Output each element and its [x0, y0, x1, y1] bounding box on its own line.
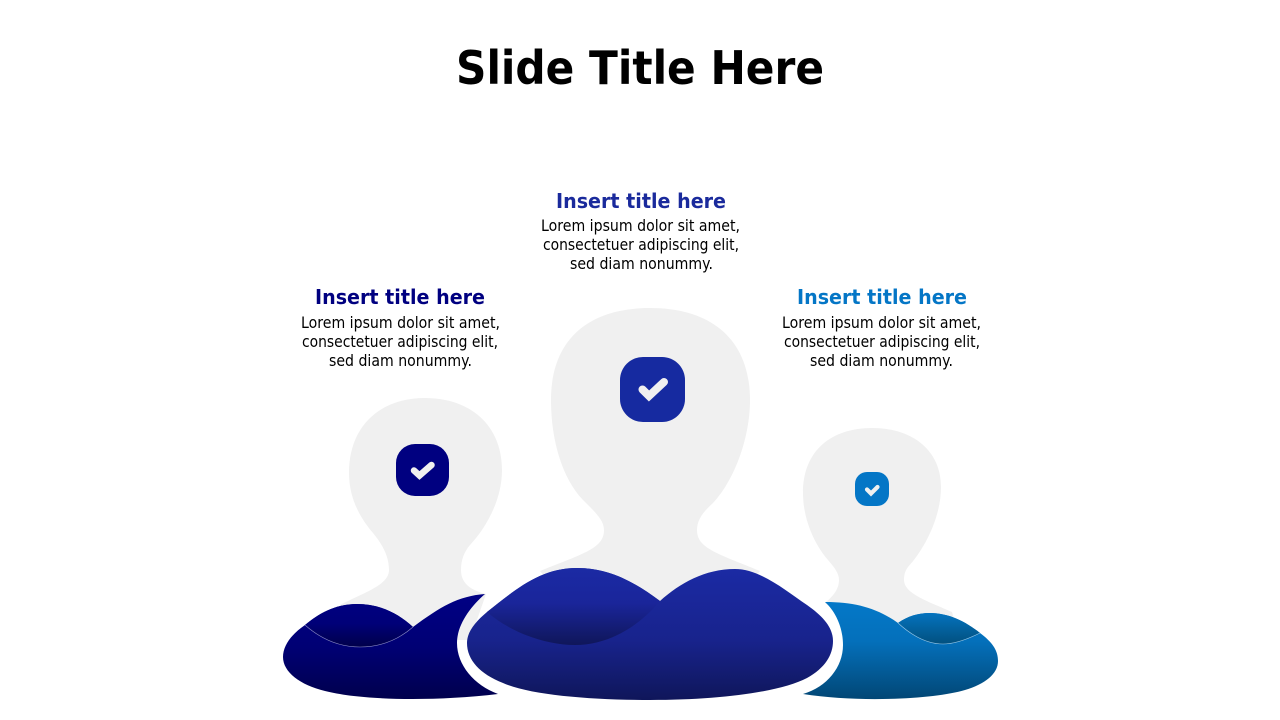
text block: left: [301, 285, 500, 370]
person: left: [283, 398, 502, 699]
center head silhouette: [540, 308, 760, 640]
center inner fold: [487, 568, 660, 645]
left inner fold: [305, 604, 413, 647]
text block: left: sed diam nonummy.: [329, 351, 472, 370]
text block: center: Lorem ipsum dolor sit amet,: [541, 216, 740, 235]
text block: right: sed diam nonummy.: [810, 351, 953, 370]
text block: right: consectetuer adipiscing elit,: [784, 332, 980, 351]
center body: [467, 568, 833, 700]
right head silhouette: [803, 428, 960, 640]
left body: [283, 594, 498, 699]
text block: left: Insert title here: [315, 285, 485, 309]
icon: center check badge: [620, 357, 685, 422]
text block: left: Lorem ipsum dolor sit amet,: [301, 313, 500, 332]
text block: center: sed diam nonummy.: [570, 254, 713, 273]
text block: center: [541, 189, 740, 273]
person: right: [803, 428, 998, 699]
text block: center: Insert title here: [556, 189, 726, 213]
left head silhouette: [340, 398, 502, 640]
text block: right: Lorem ipsum dolor sit amet,: [782, 313, 981, 332]
icon: left check badge: [396, 444, 449, 496]
text block: right: [782, 285, 981, 370]
icon: right check badge: [855, 472, 889, 506]
text block: right: Insert title here: [797, 285, 967, 309]
right body: [803, 602, 998, 699]
text block: center: consectetuer adipiscing elit,: [543, 235, 739, 254]
right inner fold: [898, 613, 980, 644]
title: Slide Title Here: [456, 41, 824, 95]
text block: left: consectetuer adipiscing elit,: [302, 332, 498, 351]
person: center: [467, 308, 833, 700]
